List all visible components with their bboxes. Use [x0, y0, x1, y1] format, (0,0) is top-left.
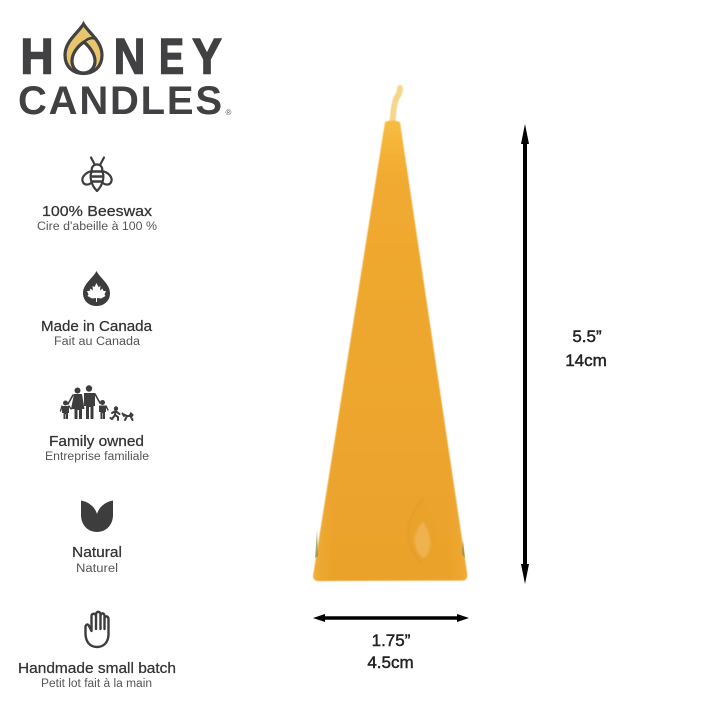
icon: bee: [82, 158, 112, 191]
logo: Honey Candles: [18, 24, 232, 123]
logo wordmark: HONEY: H: [20, 28, 54, 84]
width label: 1.75”: [372, 631, 411, 650]
width dimension arrow: [313, 614, 469, 622]
logo wordmark: HONEY: [20, 28, 222, 84]
feature: Handmade small batch: [18, 612, 176, 690]
logo wordmark: HONEY: E: [159, 28, 184, 84]
logo wordmark: HONEY: Y: [192, 28, 222, 84]
label: Cire d'abeille à 100 %: Cire d'abeille à 100 %: [37, 221, 157, 233]
label: 100% Beeswax: 100% Beeswax: [42, 204, 153, 220]
registered mark: ®: [226, 108, 232, 117]
height label: [565, 327, 607, 370]
label: Naturel: Naturel: [76, 563, 118, 575]
base edge marks: [315, 530, 318, 558]
candle: [313, 88, 467, 581]
icon: family with dog: [60, 385, 132, 420]
icon: tulip leaf: [81, 500, 113, 532]
label: Entreprise familiale: Entreprise familiale: [45, 451, 149, 463]
logo icon: flame drop: [65, 24, 102, 74]
icon: drop with maple leaf: [83, 271, 110, 306]
feature: Family owned: [45, 385, 149, 463]
feature: Natural: [72, 500, 122, 575]
icon: hand: [86, 612, 108, 647]
height label: 5.5”: [572, 327, 602, 346]
wick: [392, 88, 400, 124]
label: Natural: Natural: [72, 545, 122, 561]
width label: 4.5cm: [367, 653, 414, 672]
feature: Made in Canada: [41, 271, 153, 348]
label: Fait au Canada: Fait au Canada: [54, 336, 141, 348]
candle side shading: [313, 120, 467, 581]
embossed flame logo: [408, 498, 437, 566]
logo wordmark: HONEY: N: [114, 28, 145, 84]
label: Handmade small batch: Handmade small batch: [18, 661, 176, 677]
label: Family owned: Family owned: [49, 434, 144, 450]
label: Petit lot fait à la main: Petit lot fait à la main: [41, 678, 152, 690]
height label: 14cm: [565, 351, 607, 370]
height dimension arrow: [521, 124, 529, 584]
feature: 100% Beeswax: [37, 158, 157, 233]
logo wordmark: CANDLES: CANDLES: [18, 79, 222, 123]
label: Made in Canada: Made in Canada: [41, 319, 153, 335]
width label: [367, 631, 414, 672]
candle body: [313, 120, 467, 581]
